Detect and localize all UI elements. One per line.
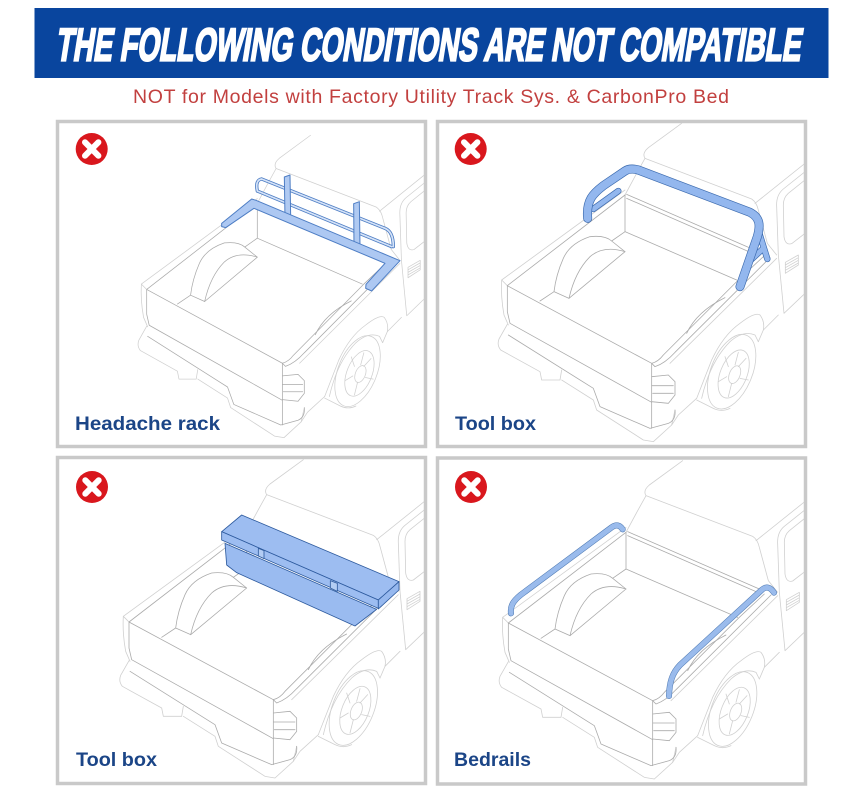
label: Tool box: [76, 750, 157, 771]
icon: red x: [76, 133, 108, 165]
icon: red x: [455, 133, 487, 165]
headache rack highlight: [222, 175, 400, 291]
panel: headache rack: [58, 122, 427, 446]
icon: red x: [76, 471, 108, 503]
label: Headache rack: [75, 414, 220, 435]
truck illustration: [138, 135, 424, 438]
roll bar highlight: [587, 169, 767, 287]
bedrails highlight: [511, 525, 774, 696]
panel: bedrails: [438, 458, 806, 784]
tool box highlight: [222, 515, 399, 626]
icon: red x: [455, 471, 487, 503]
truck illustration: [120, 460, 424, 778]
subtitle note: NOT for Models with Factory Utility Track Sys. & CarbonPro Bed: [133, 86, 729, 108]
panel: roll bar tool box: [438, 122, 806, 446]
panel: tool box: [58, 458, 427, 784]
truck illustration: [498, 460, 804, 780]
truck illustration: [498, 123, 804, 442]
label: Bedrails: [454, 750, 531, 771]
label: Tool box: [455, 414, 536, 435]
title banner: [34, 8, 828, 78]
